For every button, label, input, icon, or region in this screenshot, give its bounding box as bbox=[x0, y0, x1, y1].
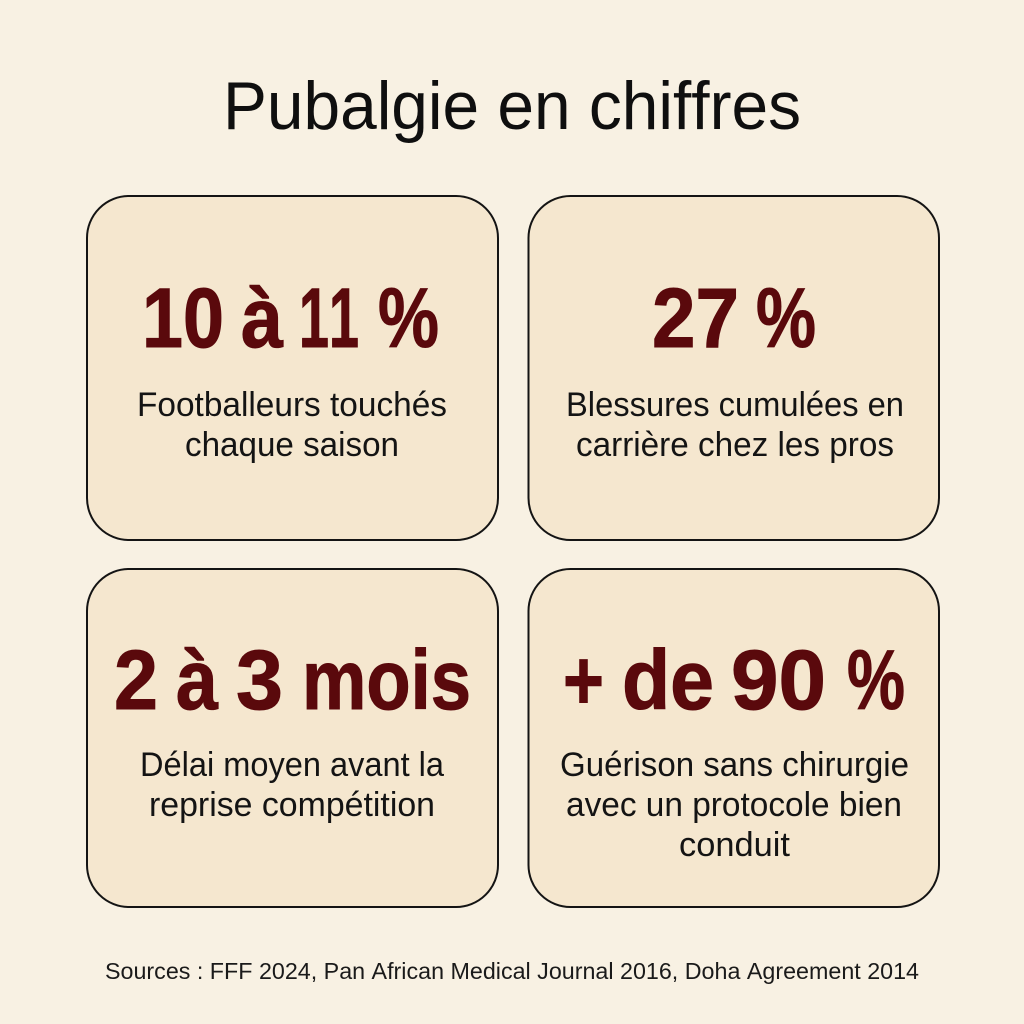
stat: 2 à 3 mois: mois bbox=[302, 633, 471, 727]
stat: 2 à 3 mois: 2 bbox=[114, 633, 158, 727]
label: footballeurs: chaque saison bbox=[185, 426, 399, 464]
stat: + de 90 %: % bbox=[847, 633, 905, 727]
label: footballeurs: Footballeurs touchés bbox=[137, 386, 447, 424]
label: délai: reprise compétition bbox=[149, 786, 435, 824]
stat: 10 à 11 %: % bbox=[378, 271, 439, 365]
panel: blessures bbox=[528, 196, 939, 540]
stat: 27 %: % bbox=[756, 271, 816, 365]
stat: 2 à 3 mois: 3 bbox=[236, 633, 283, 727]
label: footballeurs bbox=[137, 386, 447, 464]
stat: 2 à 3 mois: à bbox=[176, 633, 218, 727]
sources: Sources : FFF 2024, Pan African Medical Journal 2016, Doha Agreement 2014 bbox=[105, 958, 919, 984]
stat: + de 90 %: + bbox=[563, 633, 604, 727]
label: délai: Délai moyen avant la bbox=[140, 746, 444, 784]
title: Pubalgie en chiffres bbox=[223, 68, 801, 144]
label: blessures bbox=[566, 386, 904, 464]
label: guérison bbox=[560, 746, 909, 864]
panel: délai bbox=[87, 569, 498, 907]
label: guérison: avec un protocole bien bbox=[566, 786, 902, 824]
stat: 27 % bbox=[652, 271, 816, 365]
stat: 10 à 11 %: 10 bbox=[142, 271, 224, 365]
stat: 27 %: 27 bbox=[652, 271, 739, 365]
label: guérison: conduit bbox=[679, 826, 791, 864]
label: blessures: Blessures cumulées en bbox=[566, 386, 904, 424]
label: blessures: carrière chez les pros bbox=[576, 426, 894, 464]
stat: 10 à 11 %: 11 bbox=[299, 271, 359, 365]
stat: 2 à 3 mois bbox=[114, 633, 471, 727]
stat: + de 90 %: de bbox=[622, 633, 714, 727]
label: délai bbox=[140, 746, 444, 824]
stat: 10 à 11 %: à bbox=[241, 271, 283, 365]
stat: + de 90 % bbox=[563, 633, 905, 727]
stat: 10 à 11 % bbox=[142, 271, 439, 365]
panel: guérison bbox=[528, 569, 939, 907]
label: guérison: Guérison sans chirurgie bbox=[560, 746, 909, 784]
stat: + de 90 %: 90 bbox=[731, 633, 826, 727]
panel: footballeurs bbox=[87, 196, 498, 540]
